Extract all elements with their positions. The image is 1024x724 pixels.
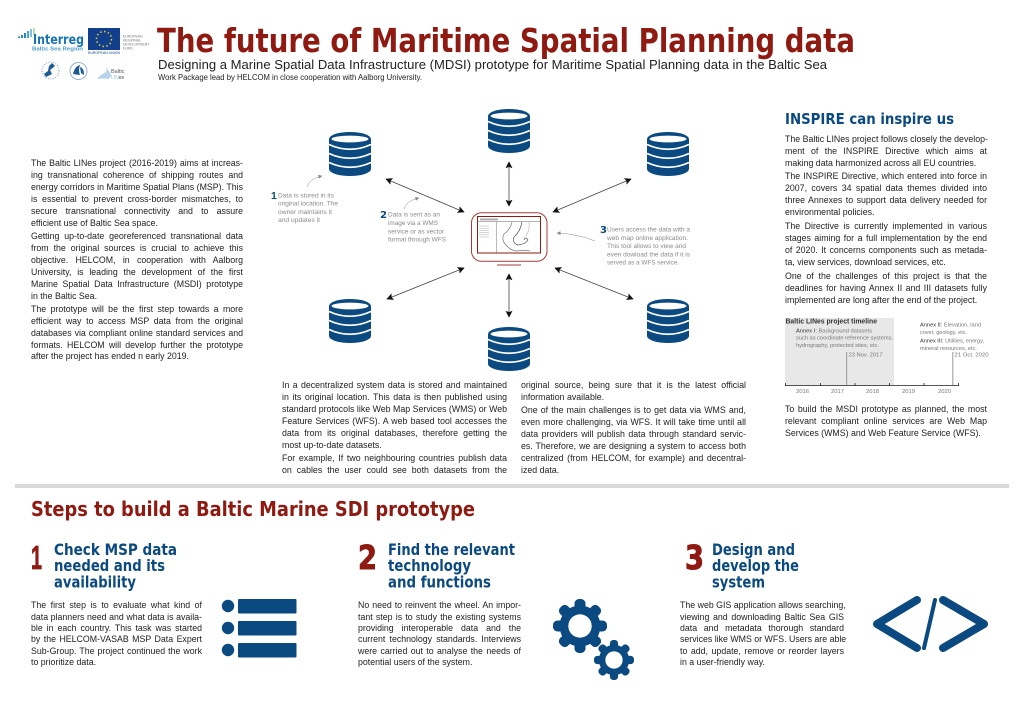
text block: INSPIRE: The Directive is currently implemented in various <box>785 221 987 231</box>
text block: step 2: tant step is to study the existing systems <box>358 612 521 622</box>
text block: step 1: to prioritize data. <box>31 657 96 667</box>
annex II and III notes: Annex II: Elevation, land <box>920 322 981 328</box>
text block: project introduction: energy corridors in Maritime Spatial Plans (MSP). This <box>31 182 243 192</box>
year labels: 2020 <box>938 389 951 395</box>
work package line: Work Package lead by HELCOM in close cooperation with Aalborg University. <box>158 73 422 82</box>
text block: INSPIRE <box>785 134 988 305</box>
diagram: decentralized system <box>271 109 691 371</box>
text block: MSDI services: relevant compliant online services are Web Map <box>785 416 987 426</box>
annex II and III notes: cover, geology, etc. <box>920 330 967 336</box>
logo: Baltic LINes <box>97 62 125 81</box>
annotation 3: even dowload the data if it is <box>607 252 691 258</box>
text block: MSDI services: Services (WMS) and Web Feature Service (WFS). <box>785 428 981 438</box>
text block: project introduction: The prototype will be the first step towards a more <box>31 304 243 314</box>
timeline title: Baltic LINes project timeline <box>786 318 877 326</box>
arrow: bottom left <box>387 268 464 299</box>
annotation 3: This tool allows to view and <box>607 243 686 250</box>
text block: INSPIRE: three Annexes to support data delivery needed for <box>785 195 987 205</box>
text block: project introduction: University, is leading the development of the first <box>31 267 243 277</box>
text block: step 3 <box>680 600 846 667</box>
logo: EU flag: REGIONAL <box>123 38 141 42</box>
icon: list <box>222 599 296 658</box>
annotation 2: 2 <box>380 210 387 221</box>
logo: EU flag: DEVELOPMENT <box>123 42 150 46</box>
subtitle: Designing a Marine Spatial Data Infrastructure (MDSI) prototype for Maritime Spatial Planning data in the Baltic Sea <box>158 57 828 72</box>
text block: INSPIRE: environmental policies. <box>785 207 874 217</box>
text block: INSPIRE: 2007, covers 34 spatial data themes divided into <box>785 183 987 193</box>
year labels: 2016 <box>796 389 809 395</box>
text block: decentralized system, column 2: information available. <box>521 392 604 402</box>
text block: project introduction: after the project has ended n early 2019. <box>31 351 189 361</box>
annex I note: hydrography, protected sites, etc. <box>796 343 879 349</box>
logo: Interreg Baltic Sea Region: Interreg <box>33 33 84 48</box>
step 3 title: develop the <box>712 556 799 575</box>
text block: INSPIRE: One of the challenges of this project is that the <box>785 271 987 281</box>
text block: project introduction: Marine Spatial Data Infrastructure (MSDI) prototype <box>31 279 243 289</box>
annex I note <box>796 328 893 349</box>
text block: decentralized system, column 1: in its original location. This data is then published using <box>282 392 507 402</box>
text block: project introduction: is essential to prevent cross-border mismatches, to <box>31 194 243 204</box>
chart: Baltic LINes project timeline <box>785 318 988 395</box>
milestone 23 Nov. 2017: 23 Nov. 2017 <box>848 352 882 358</box>
text block: decentralized system, column 1: In a decentralized system data is stored and maintained <box>282 380 507 390</box>
step 1 title <box>54 540 177 592</box>
annotation 3: 3 <box>600 225 607 236</box>
annotation 1: owner maintains it <box>278 209 332 216</box>
icon: gears <box>553 599 634 680</box>
logo: Baltic LINes: Baltic <box>111 69 125 75</box>
text block: project introduction: objective. HELCOM, in cooperation with Aalborg <box>31 255 243 265</box>
step number 3: 3 <box>685 538 704 577</box>
text block: project introduction: efficient way to access MSP data from the original <box>31 316 243 326</box>
text block: project introduction: in the Baltic Sea. <box>31 291 97 301</box>
annotation 1: and updates it <box>278 217 320 224</box>
icon: database top left <box>329 132 371 176</box>
logo: Baltic LINes: LINes <box>111 75 125 81</box>
logos <box>18 28 150 81</box>
text block: INSPIRE: making data harmonized across all EU countries. <box>785 158 976 168</box>
text block: decentralized system, column 2: original source, being sure that it is the latest official <box>521 380 746 390</box>
text block: INSPIRE: ment of the INSPIRE Directive which aims at <box>785 146 987 156</box>
annotation 2: format through WFS <box>388 236 447 244</box>
milestone 21 Oct. 2020 <box>953 352 988 385</box>
step 1 heading and icon <box>31 539 296 658</box>
text block: step 1: ble in each country. This task was started <box>31 623 202 633</box>
text block: step 1: by the HELCOM-VASAB MSP Data Expert <box>31 634 202 644</box>
text block: step 2: providing interoperable data and the <box>358 623 521 633</box>
title: The future of Maritime Spatial Planning data <box>157 21 855 60</box>
text block: step 3: services like WMS or WFS. Users are able <box>680 634 846 644</box>
milestone 23 Nov. 2017 <box>847 352 882 385</box>
text block: decentralized system, column 2: centralized (from HELCOM, for example) and decentral- <box>521 453 746 463</box>
text block: decentralized system, column 1: on cables the user could see both datasets from the <box>282 465 507 475</box>
text block: decentralized system, column 2: One of the main challenges is to get data via WMS and, <box>521 405 746 415</box>
annotation 1: 1 <box>271 190 277 202</box>
icon: database top right <box>647 132 689 176</box>
heading: steps: Steps to build a Baltic Marine SDI prototype <box>31 497 475 521</box>
step 2 heading and icon <box>358 538 634 680</box>
icon: code brackets <box>877 600 984 648</box>
annotation 1 <box>271 176 338 224</box>
text block: decentralized system, column 1: standard protocols like Web Map Services (WMS) or Web <box>282 404 507 414</box>
text block: project introduction: Getting up-to-date georeferenced transnational data <box>31 231 243 241</box>
text block: project introduction: databases via compliant online standard services and <box>31 328 243 338</box>
text block: MSDI services: To build the MSDI prototype as planned, the most <box>785 404 987 414</box>
text block: INSPIRE: deadlines for having Annex II and III datasets fully <box>785 283 987 293</box>
text block: MSDI services <box>785 404 987 438</box>
annotation 3: served as a WFS service. <box>607 260 679 266</box>
step 2 title: Find the relevant <box>388 540 515 559</box>
logo: Interreg Baltic Sea Region <box>18 28 84 52</box>
arrow: top right <box>553 179 631 212</box>
annex I note: Annex I: Background datasets <box>796 328 872 334</box>
axis <box>785 383 959 386</box>
text block: decentralized system, column 1: most up-to-date datasets. <box>282 440 382 450</box>
year labels: 2017 <box>831 389 844 395</box>
heading: INSPIRE can inspire us: INSPIRE can inspire us <box>785 110 954 128</box>
icon: monitor with web map <box>472 213 547 265</box>
text block: step 2: No need to reinvent the wheel. An impor- <box>358 600 521 610</box>
annex I note: such as coordinate reference systems, <box>796 336 893 342</box>
text block: decentralized system, column 1: data from its original databases, therefore getting the <box>282 428 507 438</box>
text block: INSPIRE: implemented are long after the end of the project. <box>785 295 977 305</box>
text block: step 2 <box>358 600 521 667</box>
text block: step 2: were carried out to analyse the needs of <box>358 646 521 656</box>
text block: step 3: in a user-friendly way. <box>680 657 765 667</box>
step 1 title: Check MSP data <box>54 540 177 559</box>
text block: INSPIRE: of 2020. It concerns components such as metada- <box>785 245 987 255</box>
annotation 1: original location. The <box>278 200 338 208</box>
step 2 title: and functions <box>388 572 491 592</box>
step number 1: 1 <box>31 539 42 576</box>
step 1 title: availability <box>54 572 136 592</box>
step 3 heading and icon <box>685 538 984 648</box>
divider <box>15 484 1009 488</box>
text block: decentralized system, column 1: Feature Services (WFS). A web based tool accesses the <box>282 416 507 426</box>
annotation 2: image via a WMS <box>388 220 439 227</box>
arrow: bottom right <box>555 268 633 299</box>
text block: project introduction: efficient use of Baltic Sea space. <box>31 218 158 228</box>
text block: project introduction <box>31 158 243 361</box>
text block: INSPIRE: The Baltic LINes project follows closely the develop- <box>785 134 988 144</box>
logo: EU flag <box>88 28 150 55</box>
text block: step 1 <box>31 600 202 667</box>
year labels: 2018 <box>866 389 879 395</box>
icon: database top centre <box>488 109 530 153</box>
text block: step 1: The first step is to evaluate what kind of <box>31 600 202 610</box>
text block: project introduction: ing transnational coherence of shipping routes and <box>31 170 243 180</box>
annex II and III notes: Annex III: Utilities, energy, <box>920 338 984 344</box>
text block: decentralized system, column 2: even more challenging, via WFS. It will take time until all <box>521 417 746 427</box>
text block: decentralized system, column 1: For example, If two neighbouring countries publish data <box>282 453 507 463</box>
annotation 2 <box>380 198 447 244</box>
logo: EU flag: EUROPEAN <box>123 34 143 38</box>
logo: HELCOM <box>42 62 59 79</box>
text block: step 1: Sub-Group. The project continued the work <box>31 646 202 656</box>
text block: decentralized system, column 2: data providers will publish data through standard servic- <box>521 429 746 439</box>
text block: decentralized system, column 2: es. Therefore, we are designing a system to access both <box>521 441 746 451</box>
text block: project introduction: secure transnational connectivity and to assure <box>31 206 243 216</box>
text block: decentralized system, column 2 <box>521 380 746 475</box>
step 2 title: technology <box>388 556 471 575</box>
annotation 1: Data is stored in its <box>278 192 335 200</box>
text block: INSPIRE: The INSPIRE Directive, which entered into force in <box>785 171 987 181</box>
arrow: top centre <box>508 162 510 206</box>
text block: decentralized system, column 1 <box>282 380 507 475</box>
step 3 title <box>712 540 799 592</box>
icon: database bottom left <box>329 299 371 343</box>
text block: step 3: data and metadata thorough standard <box>680 623 844 633</box>
logo: EU flag: FUND <box>123 46 133 50</box>
logo: Aalborg University <box>70 62 87 80</box>
icon: database bottom centre <box>488 327 530 371</box>
step 1 title: needed and its <box>54 556 165 575</box>
annotation 3: Users access the data with a <box>607 226 690 234</box>
text block: decentralized system, column 2: ized data. <box>521 465 559 475</box>
step 3 title: system <box>712 572 765 592</box>
annotation 3: web map online application. <box>606 235 688 242</box>
arrow: top left <box>386 179 464 212</box>
text block: step 3: to add, update, remove or reorder layers <box>680 646 844 656</box>
text block: step 2: potential users of the system. <box>358 657 472 667</box>
year labels <box>796 389 951 395</box>
annex II and III notes: mineral resources, etc. <box>920 346 977 352</box>
milestone 21 Oct. 2020: 21 Oct. 2020 <box>954 352 988 358</box>
arrow: bottom centre <box>508 274 510 317</box>
text block: project introduction: The Baltic LINes project (2016-2019) aims at increas- <box>31 158 243 168</box>
annotation 2: service or as vector <box>388 228 445 236</box>
text block: project introduction: formats. HELCOM will develop further the prototype <box>31 340 243 350</box>
text block: step 1: data planners need and what data is availa- <box>31 612 202 622</box>
logo: EU flag: EUROPEAN UNION <box>88 51 120 55</box>
text block: INSPIRE: stages aiming for a full implementation by the end <box>785 233 987 243</box>
annex II and III notes <box>920 322 984 352</box>
annotation 3 <box>557 225 691 266</box>
annotation 2: Data is sent as an <box>388 212 440 218</box>
text block: project introduction: from the original sources is crucial to achieve this <box>31 243 243 253</box>
icon: database bottom right <box>647 299 689 343</box>
step 2 title <box>388 540 515 592</box>
text block: step 2: current technology standards. Interviews <box>358 634 521 644</box>
step number 2: 2 <box>358 538 377 577</box>
text block: INSPIRE: ta, view services, download services, etc. <box>785 257 946 267</box>
step 3 title: Design and <box>712 540 795 559</box>
logo: Interreg Baltic Sea Region: Baltic Sea Region <box>32 46 84 52</box>
year labels: 2019 <box>902 389 915 395</box>
text block: step 3: The web GIS application allows searching, <box>680 600 846 610</box>
text block: step 3: viewing and downloading Baltic Sea GIS <box>680 612 844 622</box>
